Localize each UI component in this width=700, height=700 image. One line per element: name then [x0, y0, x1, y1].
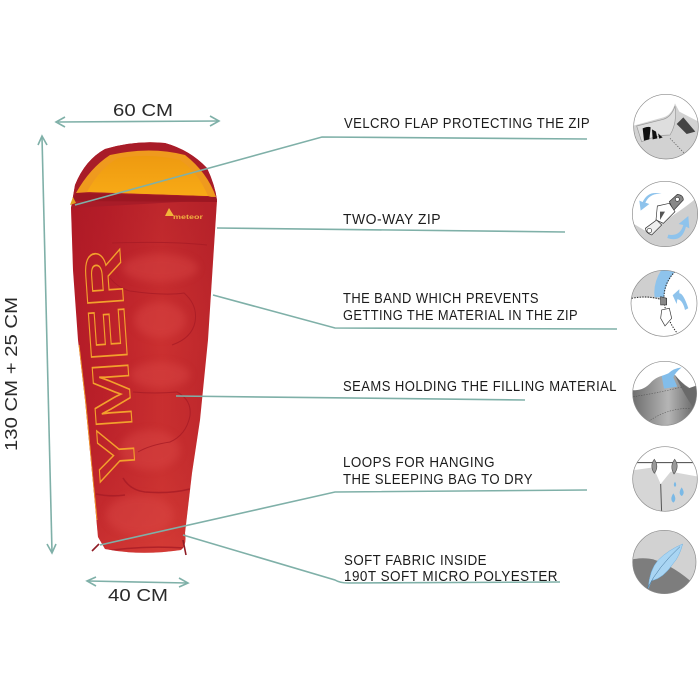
- hanging loops: [92, 540, 186, 555]
- brand mark: meteor: [173, 214, 204, 221]
- hood opening: [70, 150, 217, 205]
- callout: soft fabric: [183, 535, 560, 585]
- dimension: width 40 cm: 40 CM: [108, 585, 168, 605]
- dimension: length 130 cm + 25 cm: 130 CM + 25 CM: [1, 297, 21, 451]
- callout: velcro flap: VELCRO FLAP PROTECTING THE ZIP: [344, 116, 590, 132]
- logo lettering on bag: YMER: [74, 247, 148, 484]
- callout: two-way zip: TWO-WAY ZIP: [343, 212, 441, 228]
- orange side piping: [79, 345, 97, 520]
- icon: band: [630, 268, 700, 338]
- callout: loops: [100, 455, 587, 545]
- icon: two-way zip: [632, 181, 698, 247]
- icon: seams: [630, 360, 700, 427]
- infographic canvas: [5, 94, 699, 601]
- icon: feather: [632, 530, 696, 594]
- callout: seams: SEAMS HOLDING THE FILLING MATERIAL: [343, 379, 617, 395]
- dimension: length 130 cm + 25 cm: [1, 136, 56, 553]
- sleeping bag: [70, 142, 217, 556]
- icon: velcro flap: [633, 94, 699, 160]
- dimension: width 60 cm: [56, 100, 219, 127]
- callout: velcro flap: [75, 116, 590, 205]
- dimension: width 40 cm: [87, 577, 188, 605]
- callout: soft fabric: SOFT FABRIC INSIDE: [344, 553, 487, 569]
- brand mark: [165, 208, 204, 221]
- callout: band: THE BAND WHICH PREVENTS: [343, 291, 539, 307]
- callout: loops: THE SLEEPING BAG TO DRY: [343, 472, 533, 488]
- callout: two-way zip: [217, 212, 565, 232]
- callout: band: GETTING THE MATERIAL IN THE ZIP: [343, 308, 578, 324]
- dimension: width 60 cm: 60 CM: [113, 100, 173, 120]
- callout: band: [213, 291, 617, 329]
- callout: loops: LOOPS FOR HANGING: [343, 455, 495, 471]
- icon: hanging loops: [632, 446, 698, 512]
- quilting highlights: [106, 254, 198, 535]
- callout: seams: [176, 379, 617, 400]
- callout: soft fabric: 190T SOFT MICRO POLYESTER: [344, 569, 558, 585]
